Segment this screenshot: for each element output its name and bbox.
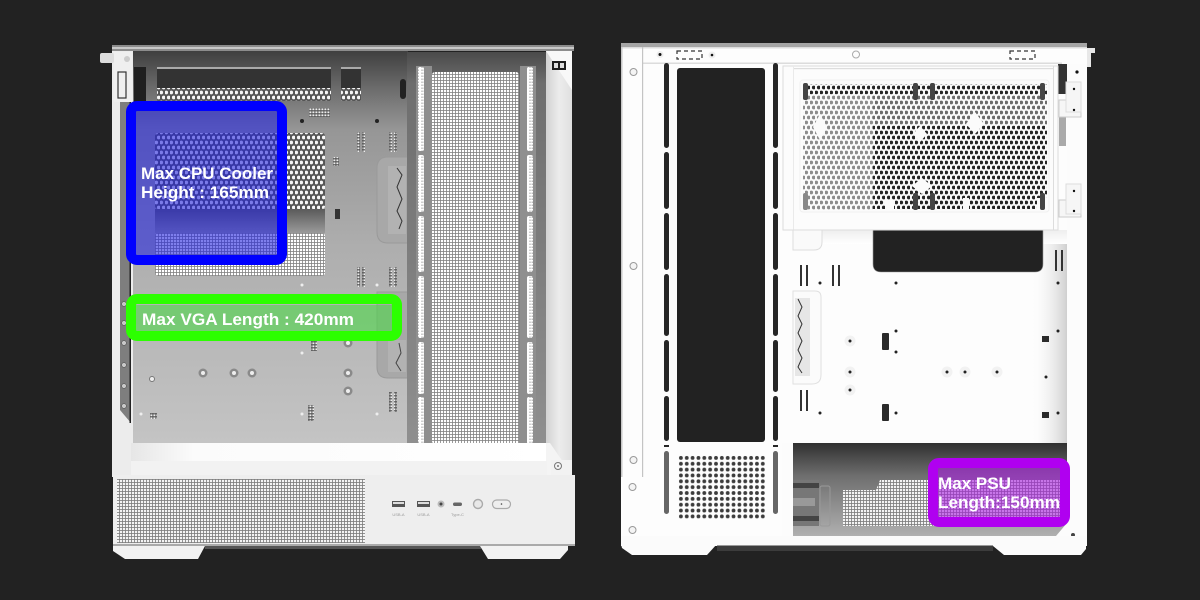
callout text: Max PSU [938,475,1011,493]
PSU bay left connector [793,480,830,526]
white bottom shelf [131,443,547,463]
dark opening under bracket [873,228,1043,272]
right case white body [621,46,1087,536]
top right corner plate [546,51,572,90]
dark top row left [808,84,874,94]
callout tint [136,305,392,331]
dot grid vent [678,455,766,519]
interior back panel [130,51,408,444]
panel top shadow below bracket [793,230,1067,244]
io ports: USB-A [392,512,405,517]
left foot [621,544,717,555]
left foot [113,546,205,559]
left rivet rail [120,100,131,423]
rear top strip details [621,47,1087,477]
bottom frame [621,536,1087,551]
callout text: Max CPU Cooler [141,165,274,183]
grey fan holes left [803,94,873,210]
panel tall slots [800,250,1063,411]
mid grey fan holes [803,94,1047,126]
dark band below perforation [155,209,325,233]
light fan area top [803,94,1047,126]
io ports: Type-C [451,512,464,517]
right foot [993,546,1086,555]
blocked corner patches [803,112,1047,210]
callout: max CPU cooler height [131,106,282,260]
right glass pillar [546,51,572,476]
right dark slots [773,63,778,514]
vertical fan mesh [432,72,519,444]
bracket hole plate [800,80,1049,212]
front IO bar [113,475,575,545]
top frame [621,43,1087,47]
left vertical slots [418,67,424,444]
right edge dark slit [1058,64,1067,146]
rear PSU bracket [783,66,1058,230]
callout text: Length:150mm [938,494,1060,512]
io ports [392,500,510,517]
standoffs [140,119,379,416]
small hole clusters on panel [150,108,397,421]
callout border [933,463,1065,522]
PSU bay [793,443,1067,536]
PSU bay rear mesh [843,480,1060,526]
shelf corner [546,443,572,475]
callout tint [938,468,1060,517]
PSU corner [1056,523,1075,537]
right case: rear view of chassis [621,43,1095,555]
panel holes and standoffs [818,282,1060,421]
bottom edge [113,544,575,549]
hinges [1059,48,1095,217]
callout border [131,106,282,260]
top left latch tab [100,52,132,102]
callout tint [136,111,277,255]
top cable bracket [793,230,822,250]
right foot [480,546,568,559]
cable cover bracket upper [377,157,409,243]
cable cover bracket lower [377,292,409,378]
lighter fan left area [803,84,873,210]
callout border [131,299,397,336]
left case: front view of open chassis [100,45,575,559]
left pillar [112,51,133,477]
callout: max PSU length [933,463,1065,522]
callout text: Height : 165mm [141,184,269,202]
bottom front mesh [117,479,365,543]
main black opening [677,68,765,442]
top exhaust cutouts [134,67,406,105]
lower cable bracket with zigzag [793,291,821,384]
channel inner light strips [416,66,536,444]
callout: max VGA length [131,299,397,336]
shelf lower strip [131,461,547,476]
corner screw [551,460,572,475]
left dark slots [664,63,669,514]
mounting slot marks [803,83,1045,210]
fine mesh below CPU cutout [155,233,325,276]
callout text: Max VGA Length : 420mm [142,311,354,329]
right rail [1067,64,1087,536]
vertical channel [407,52,547,444]
left screws [629,68,637,534]
top frame [112,45,574,51]
right vertical slots [527,67,533,444]
interior right shade [1030,230,1067,444]
rear frame left panel cover [782,443,793,536]
perforated CPU cutout [155,133,325,209]
dark fan holes [803,84,1047,209]
io ports: USB-A [417,512,430,517]
